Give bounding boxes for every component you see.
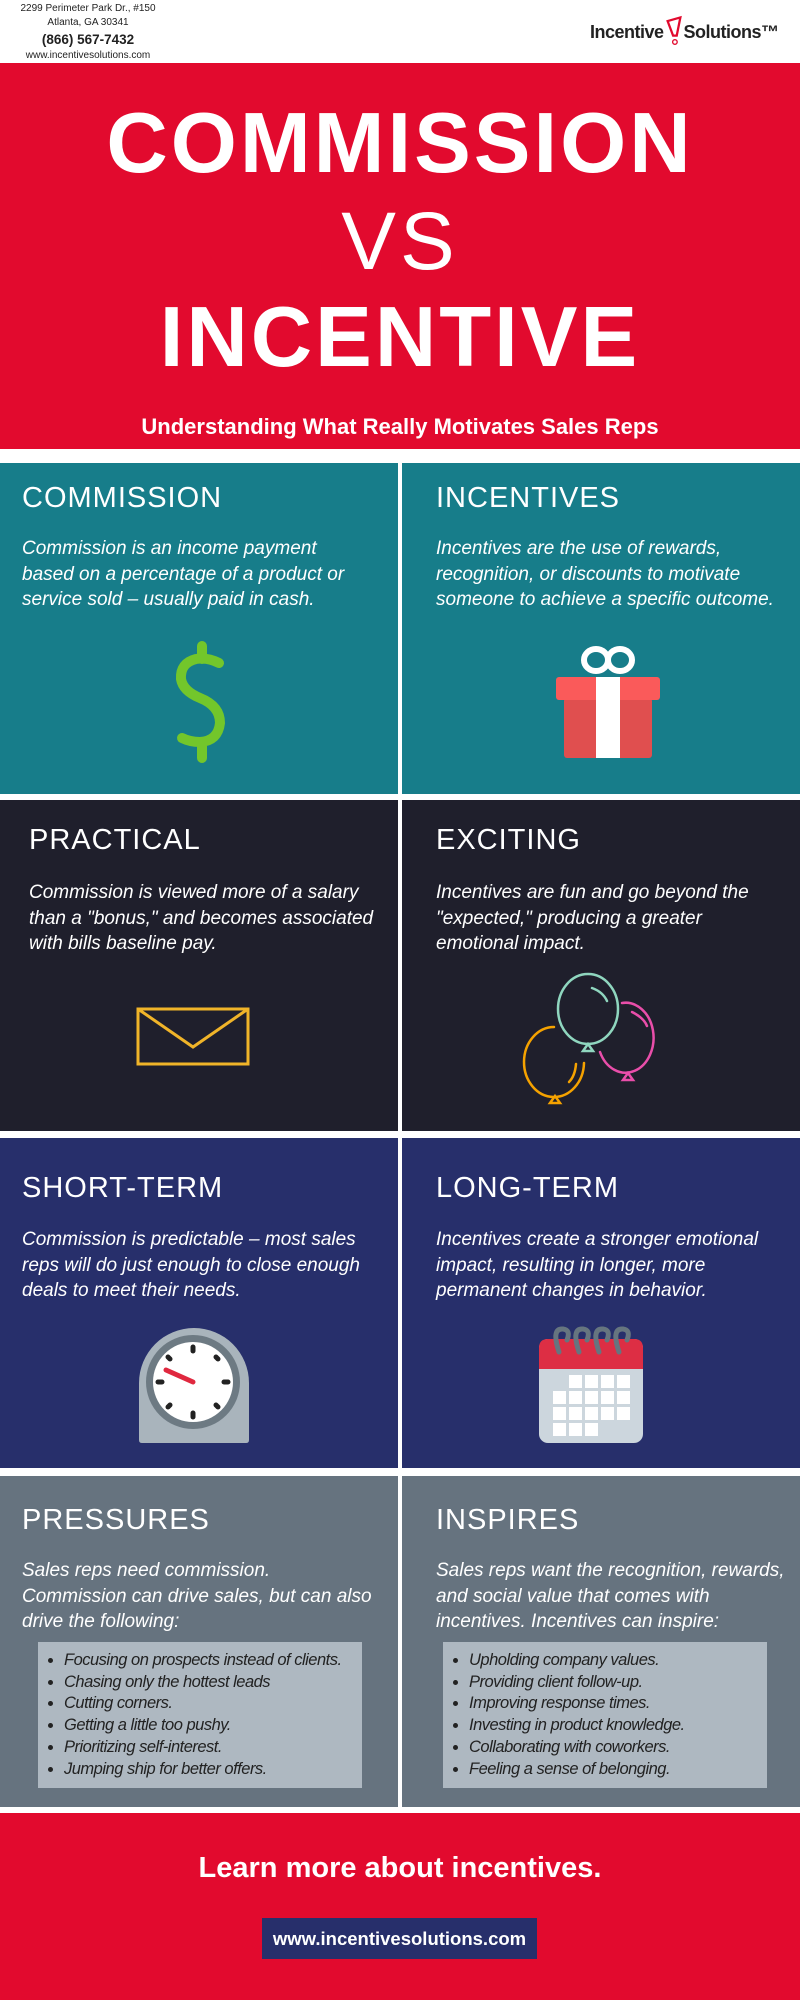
header: address: 2299 Perimeter Park Dr., #150 xyxy=(20,3,156,14)
list: inspires: Providing client follow-up. xyxy=(469,1673,643,1691)
panel: short-term xyxy=(0,1138,398,1468)
logo xyxy=(590,16,779,45)
icon: gift xyxy=(556,646,660,758)
panel: long-term: LONG-TERM xyxy=(436,1172,619,1204)
panel: pressures: PRESSURES xyxy=(22,1504,210,1536)
list: pressures: Getting a little too pushy. xyxy=(64,1716,231,1734)
list: pressures xyxy=(38,1642,362,1788)
panel: long-term xyxy=(402,1138,800,1468)
list: inspires: Upholding company values. xyxy=(469,1651,659,1669)
list: pressures: Cutting corners. xyxy=(64,1694,172,1712)
list: pressures: Prioritizing self-interest. xyxy=(64,1738,222,1756)
icon: clock xyxy=(139,1328,249,1443)
list: pressures: Focusing on prospects instead of clients. xyxy=(64,1651,342,1669)
panel: commission xyxy=(0,463,398,794)
panel: inspires: INSPIRES xyxy=(436,1504,579,1536)
list: inspires: Collaborating with coworkers. xyxy=(469,1738,670,1756)
list: pressures: Chasing only the hottest leads xyxy=(64,1673,270,1691)
list: inspires xyxy=(443,1642,767,1788)
title: COMMISSION xyxy=(106,96,694,191)
panel: practical: PRACTICAL xyxy=(29,824,201,856)
panel: long-term: Incentives create a stronger emotional impact, resulting in longer, more permanent changes in behavior. xyxy=(436,1229,758,1301)
icon: envelope xyxy=(136,1008,250,1066)
panel: pressures: Commission can drive sales, but can also drive the following: xyxy=(22,1586,372,1632)
panel: incentives xyxy=(402,463,800,794)
title banner: VS xyxy=(341,196,459,287)
panel: incentives: Incentives are the use of rewards, recognition, or discounts to motivate someone to achieve a specific outcome. xyxy=(436,538,774,610)
header: address: www.incentivesolutions.com xyxy=(26,50,150,61)
panel: inspires xyxy=(402,1476,800,1807)
list: inspires: Feeling a sense of belonging. xyxy=(469,1760,670,1778)
title banner: INCENTIVE xyxy=(160,290,640,385)
list: inspires: Investing in product knowledge. xyxy=(469,1716,685,1734)
panel: inspires: Sales reps want the recognition, rewards, and social value that comes with incentives. Incentives can inspire: xyxy=(436,1560,785,1632)
logo: Incentive Solutions™ xyxy=(590,22,779,42)
footer heading: Learn more about incentives. xyxy=(199,1852,601,1884)
panel: practical: Commission is viewed more of a salary than a "bonus," and becomes associated with bills baseline pay. xyxy=(29,882,373,954)
title banner xyxy=(0,63,800,449)
header: address: Atlanta, GA 30341 xyxy=(47,17,129,28)
panel: exciting xyxy=(402,800,800,1131)
panel: pressures xyxy=(0,1476,398,1807)
footer xyxy=(0,1813,800,2000)
panel: short-term: Commission is predictable – most sales reps will do just enough to close enough deals to meet their needs. xyxy=(22,1229,360,1301)
button: url xyxy=(262,1918,537,1959)
panel: commission: COMMISSION xyxy=(22,482,222,514)
panel: exciting: EXCITING xyxy=(436,824,581,856)
panel: short-term: SHORT-TERM xyxy=(22,1172,223,1204)
subtitle: Understanding What Really Motivates Sales Reps xyxy=(141,414,659,439)
panel: incentives: INCENTIVES xyxy=(436,482,620,514)
list: inspires: Improving response times. xyxy=(469,1694,650,1712)
panel: exciting: Incentives are fun and go beyond the "expected," producing a greater emotional impact. xyxy=(436,882,749,954)
icon: dollar xyxy=(176,641,225,763)
panel: practical xyxy=(0,800,398,1131)
icon: calendar xyxy=(539,1326,643,1443)
header: address xyxy=(20,3,156,61)
header: address: (866) 567-7432 xyxy=(42,32,134,47)
icon: balloons xyxy=(522,972,655,1104)
button: url: www.incentivesolutions.com xyxy=(273,1928,526,1949)
panel: pressures: Sales reps need commission. xyxy=(22,1560,270,1581)
list: pressures: Jumping ship for better offers. xyxy=(64,1760,267,1778)
panel: commission: Commission is an income payment based on a percentage of a product or service sold – usually paid in cash. xyxy=(22,538,344,610)
